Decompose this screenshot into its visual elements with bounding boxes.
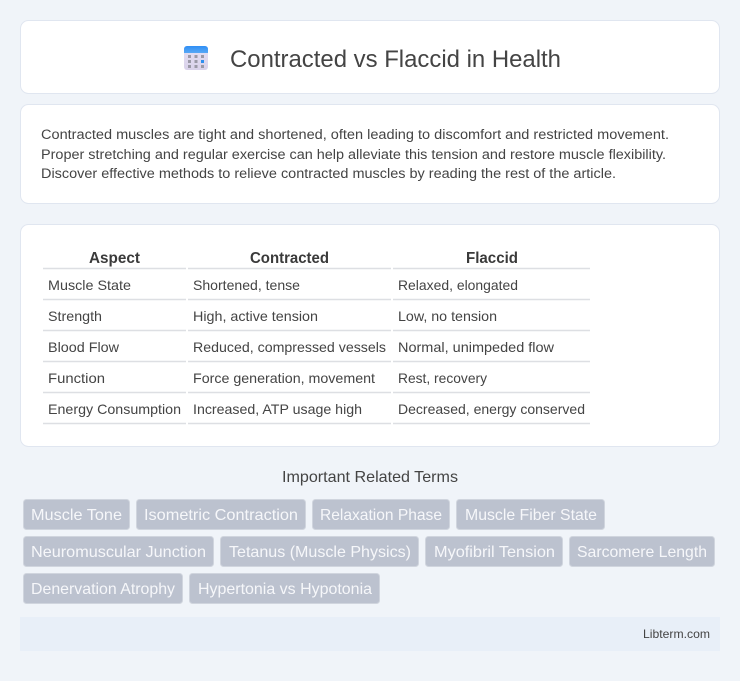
table row: energy consumption: Increased, ATP usage high <box>193 401 362 417</box>
table row: energy consumption: Energy Consumption <box>48 401 181 417</box>
table header: Flaccid <box>466 250 518 267</box>
tag: tetanus: Tetanus (Muscle Physics) <box>229 544 411 561</box>
tags: related terms <box>24 500 714 604</box>
text block: introduction: Contracted muscles are tight and shortened, often leading to discomfort and restricted movement. <box>41 127 669 143</box>
tag: hypertonia vs hypotonia: Hypertonia vs Hypotonia <box>198 581 372 598</box>
tag: neuromuscular junction: Neuromuscular Junction <box>31 544 206 561</box>
text block: introduction: Proper stretching and regular exercise can help alleviate this tension and restore muscle flexibility. <box>41 147 666 163</box>
table row: muscle state: Muscle State <box>48 277 131 293</box>
tag: sarcomere length: Sarcomere Length <box>577 544 707 561</box>
table row: energy consumption <box>48 401 585 417</box>
table row: muscle state: Shortened, tense <box>193 277 300 293</box>
heading: related terms: Important Related Terms <box>282 469 458 486</box>
table row: blood flow: Blood Flow <box>48 339 120 355</box>
table header <box>89 250 518 267</box>
table row: blood flow <box>48 339 555 355</box>
text block: introduction: Discover effective methods to relieve contracted muscles by reading the rest of the article. <box>41 166 616 182</box>
footer <box>20 617 720 651</box>
footer: Libterm.com <box>643 627 710 641</box>
panel: comparison table <box>20 224 720 446</box>
tag: denervation atrophy <box>24 574 182 604</box>
tag: myofibril tension: Myofibril Tension <box>434 544 555 561</box>
tag: isometric contraction: Isometric Contraction <box>144 507 298 524</box>
title: Contracted vs Flaccid in Health <box>230 46 561 73</box>
tag: isometric contraction <box>136 500 306 530</box>
table header: Contracted <box>250 250 329 267</box>
table row: strength: High, active tension <box>193 308 318 324</box>
panel: introduction <box>20 104 720 204</box>
text block: introduction <box>41 127 669 182</box>
table row: muscle state <box>48 277 518 293</box>
table row: strength <box>48 308 497 324</box>
tag: relaxation phase: Relaxation Phase <box>320 507 442 524</box>
tag: hypertonia vs hypotonia <box>190 574 380 604</box>
tag: muscle tone: Muscle Tone <box>31 507 122 524</box>
icon: calendar <box>184 46 208 70</box>
tag: denervation atrophy: Denervation Atrophy <box>31 581 175 598</box>
tag: muscle tone <box>24 500 130 530</box>
table header: Aspect <box>89 250 141 267</box>
table row: energy consumption: Decreased, energy conserved <box>398 401 585 417</box>
table row: strength: Low, no tension <box>398 308 497 324</box>
tag: neuromuscular junction <box>24 536 214 566</box>
tag: sarcomere length <box>570 536 714 566</box>
table row: blood flow: Normal, unimpeded flow <box>398 339 555 355</box>
tag: muscle fiber state: Muscle Fiber State <box>465 507 597 524</box>
tag: relaxation phase <box>312 500 450 530</box>
table row: blood flow: Reduced, compressed vessels <box>193 339 386 355</box>
panel: header <box>20 20 720 94</box>
tag: tetanus <box>220 536 418 566</box>
table row: function: Rest, recovery <box>398 370 487 386</box>
tag: myofibril tension <box>426 536 562 566</box>
table row: muscle state: Relaxed, elongated <box>398 277 518 293</box>
tag: muscle fiber state <box>456 500 604 530</box>
table row: strength: Strength <box>48 308 102 324</box>
table row: function: Force generation, movement <box>193 370 375 386</box>
table row: function: Function <box>48 370 105 386</box>
table row: function <box>48 370 487 386</box>
